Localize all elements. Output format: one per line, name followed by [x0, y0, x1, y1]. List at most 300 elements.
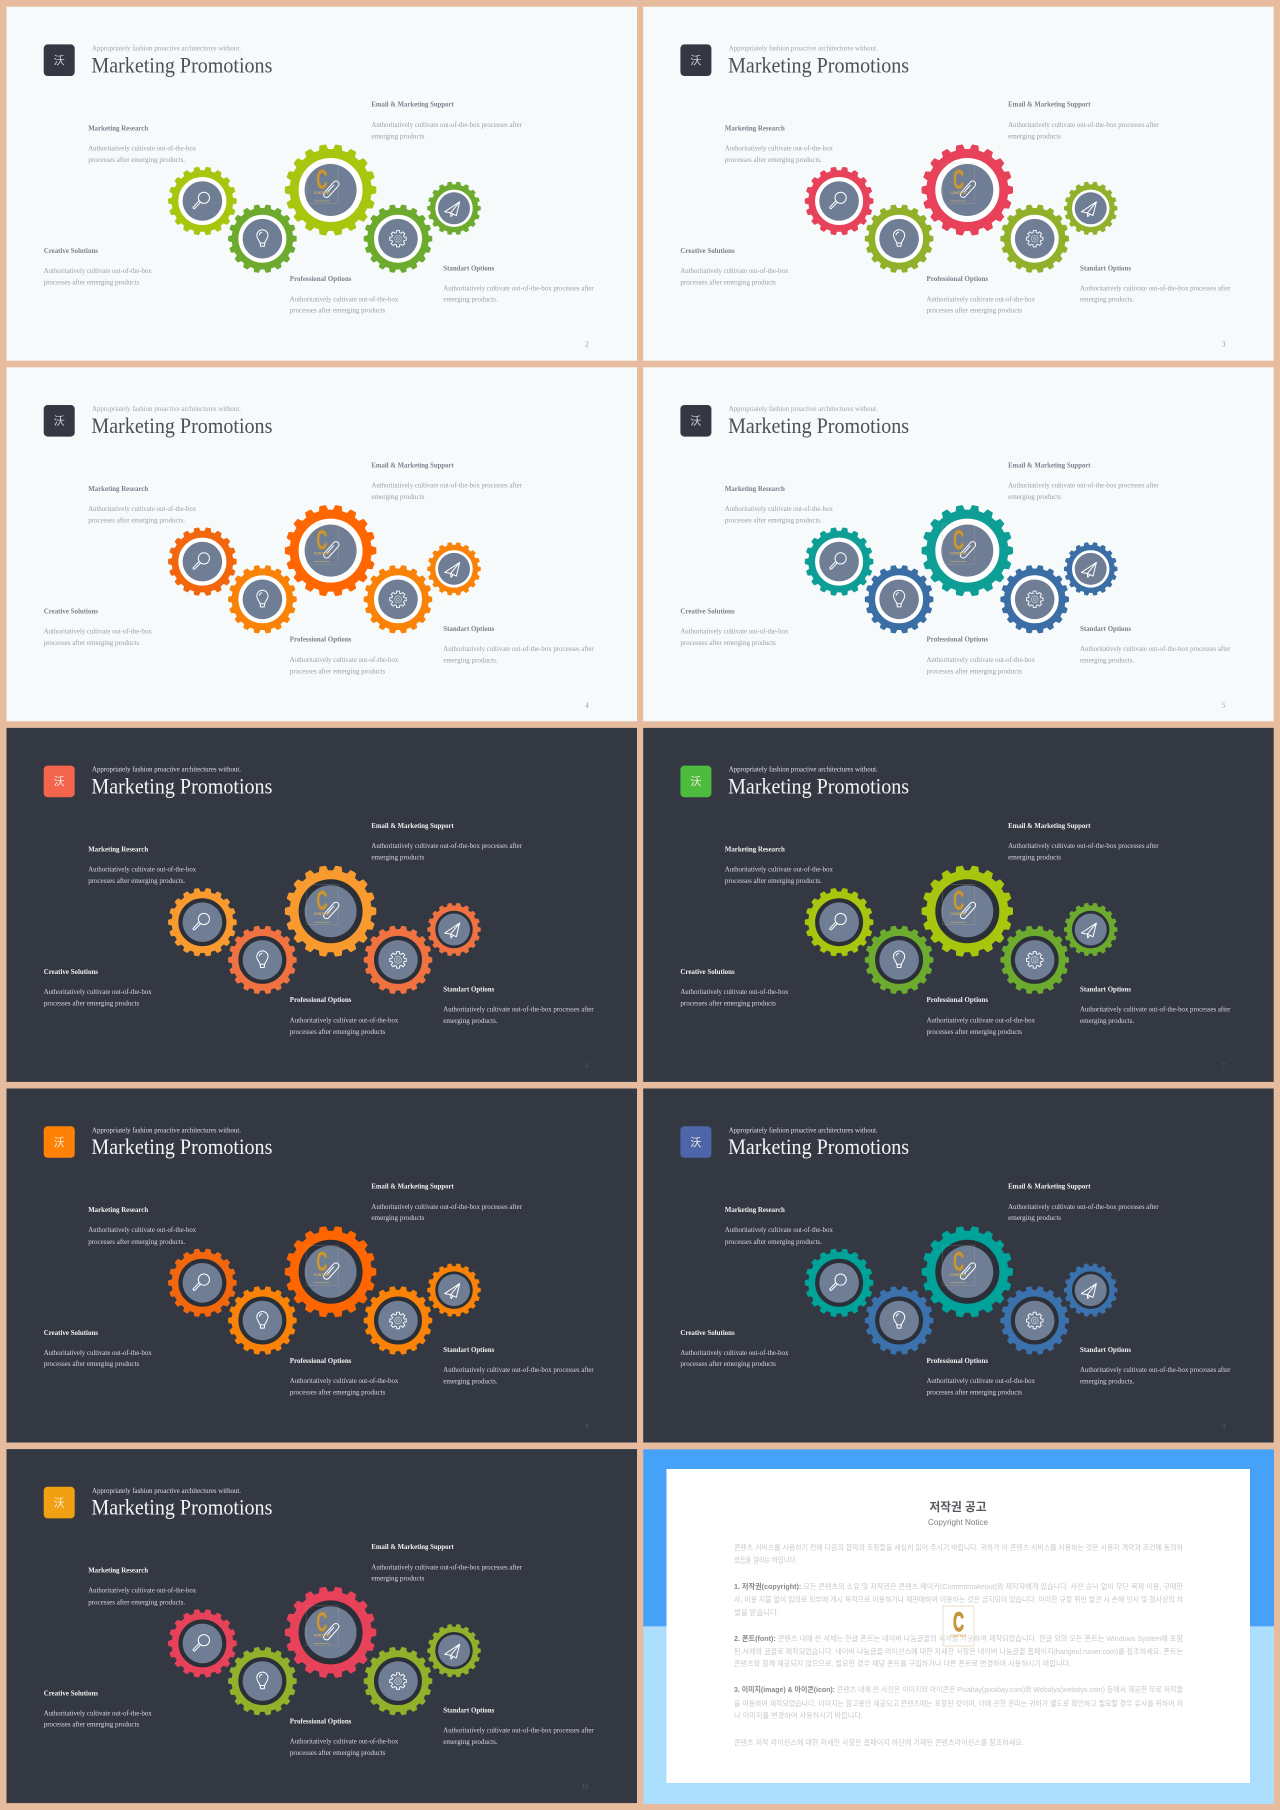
gear chain: [168, 144, 481, 273]
text: creative solutions: [44, 1328, 152, 1368]
text: professional options: [290, 1716, 399, 1757]
text: marketing research: Authoritatively cultivate out-of-the-box: [88, 1225, 196, 1234]
text: email and marketing support: Authoritatively cultivate out-of-the-box processes after: [371, 120, 522, 129]
icon badge: [44, 1126, 75, 1158]
gear: paper plane: [427, 1624, 481, 1678]
gear chain: [168, 1587, 481, 1715]
paragraph: image and icon: 나 이미지를 변경하여 사용하시기 바랍니다.: [734, 1710, 863, 1720]
text: standart options: Authoritatively cultivate out-of-the-box processes after: [443, 1726, 594, 1735]
text: email and marketing support: Authoritatively cultivate out-of-the-box processes after: [1008, 841, 1159, 850]
page number: 7: [1222, 1062, 1226, 1070]
text: email and marketing support: emerging products: [1008, 853, 1061, 862]
panel: slide 5 light teal: [643, 367, 1274, 721]
text: email and marketing support: emerging products: [1008, 492, 1061, 501]
paragraph: copyright: 1. 저작권(copyright): 모든 콘텐츠의 소유 및 저작권은 콘텐츠 메이커(Contentmakeout)와 제작자에게 있습니다. 사전 승낙 없이 무단 복제 이용, 구매한: [734, 1581, 1183, 1591]
text: standart options: Standart Options: [443, 263, 494, 272]
text: professional options: Authoritatively cultivate out-of-the-box: [926, 294, 1035, 303]
gear: pencil, large: [285, 144, 376, 236]
gear: paper plane: [1064, 181, 1117, 235]
text: standart options: emerging products.: [443, 295, 498, 304]
text: creative solutions: Authoritatively cultivate out-of-the-box: [44, 1348, 152, 1357]
title: Marketing Promotions: [91, 1134, 272, 1159]
text: creative solutions: Authoritatively cultivate out-of-the-box: [44, 987, 152, 996]
gear: pencil, large: [922, 865, 1013, 957]
text: email and marketing support: emerging products: [371, 492, 424, 501]
gear: cog: [364, 1286, 432, 1355]
paragraph: copyright: [734, 1581, 1183, 1617]
text: professional options: [290, 995, 399, 1036]
gear: cog: [364, 565, 432, 634]
text: creative solutions: Creative Solutions: [44, 1328, 98, 1337]
subtitle: Appropriately fashion proactive architectures without.: [729, 404, 878, 413]
text: email and marketing support: emerging products: [1008, 1213, 1061, 1222]
text: email and marketing support: Authoritatively cultivate out-of-the-box processes after: [371, 481, 522, 490]
text: email and marketing support: [371, 1182, 522, 1222]
text: email and marketing support: Email & Marketing Support: [371, 1182, 454, 1191]
text: marketing research: [88, 484, 196, 525]
text: professional options: [926, 274, 1035, 315]
text: professional options: [926, 635, 1035, 675]
text: email and marketing support: Email & Marketing Support: [371, 821, 454, 830]
text: professional options: Authoritatively cultivate out-of-the-box: [926, 1376, 1035, 1385]
gear: search: [168, 1609, 237, 1678]
gear: pencil, large: [922, 144, 1013, 236]
gear: cog: [364, 926, 432, 994]
gear: bulb: [865, 1286, 933, 1355]
paragraph: image and icon: 을 이용하여 제작되었습니다. 이미지는 참고용만 제공되고 콘텐츠에는 포함된 것이며, 이에 관한 권리는 귀하가 별도로 확인하고 필요할 경우 유사를 위하여 저: [734, 1698, 1183, 1708]
icon badge: 沃: [690, 415, 701, 428]
paragraph: font: 콘텐츠와 함께 제공되지 않으므로, 필요한 경우 해당 폰트를 구입하거나 다른 폰트로 변경하여 사용하시기 바랍니다.: [734, 1658, 1071, 1668]
panel: slide 2 light lime: [6, 7, 637, 361]
text: professional options: processes after emerging products: [290, 306, 385, 315]
gear: search: [168, 167, 237, 235]
text: professional options: Professional Options: [926, 274, 988, 283]
gear chain: [168, 1226, 481, 1355]
text: professional options: processes after emerging products: [926, 1388, 1022, 1397]
text: professional options: Authoritatively cultivate out-of-the-box: [926, 1016, 1035, 1024]
icon badge: 沃: [54, 1136, 65, 1149]
text: creative solutions: Creative Solutions: [44, 246, 98, 255]
text: professional options: [290, 635, 399, 675]
text: professional options: processes after emerging products: [926, 1027, 1022, 1036]
text: marketing research: Marketing Research: [88, 1205, 149, 1214]
text: email and marketing support: Email & Marketing Support: [1008, 100, 1091, 109]
copyright subtitle: Copyright Notice: [928, 1518, 988, 1527]
text: professional options: Professional Options: [290, 995, 351, 1004]
text: creative solutions: processes after emerging products: [44, 1359, 139, 1368]
text: marketing research: Marketing Research: [725, 484, 786, 493]
gear: bulb: [228, 926, 297, 994]
gear: cog: [1000, 565, 1069, 634]
text: creative solutions: processes after emerging products: [44, 998, 139, 1008]
text: marketing research: processes after emerging products.: [88, 1237, 185, 1246]
text: email and marketing support: Email & Marketing Support: [371, 100, 454, 109]
gear: paper plane: [427, 181, 481, 235]
closing note: 콘텐츠 저작 라이선스에 대한 자세한 사항은 홈페이지 하단에 기재된 콘텐츠라이선스를 참조하세요.: [734, 1737, 1024, 1747]
text: creative solutions: processes after emerging products: [680, 998, 776, 1008]
text: marketing research: Authoritatively cultivate out-of-the-box: [88, 143, 196, 152]
text: marketing research: processes after emerging products.: [725, 1237, 822, 1246]
text: standart options: Standart Options: [443, 1706, 494, 1715]
text: professional options: Authoritatively cultivate out-of-the-box: [290, 294, 399, 303]
text: creative solutions: Creative Solutions: [44, 607, 98, 616]
intro paragraph: 셨음을 알리는 바입니다.: [734, 1554, 797, 1564]
gear: bulb: [865, 565, 933, 634]
text: creative solutions: [680, 607, 789, 647]
text: creative solutions: Authoritatively cultivate out-of-the-box: [680, 266, 789, 275]
text: standart options: emerging products.: [443, 655, 498, 664]
text: email and marketing support: Email & Marketing Support: [1008, 1182, 1091, 1191]
text: marketing research: [725, 844, 833, 885]
text: email and marketing support: Authoritatively cultivate out-of-the-box processes after: [371, 841, 522, 850]
text: creative solutions: processes after emerging products: [44, 1720, 139, 1729]
panel: slide 3 light red: [643, 7, 1274, 361]
icon badge: 沃: [690, 775, 701, 788]
panel: slide 10 dark red: [6, 1449, 637, 1803]
gear: search: [168, 527, 237, 596]
text: creative solutions: processes after emerging products: [680, 638, 776, 647]
text: standart options: Standart Options: [1080, 624, 1131, 633]
text: marketing research: Marketing Research: [88, 845, 149, 854]
text: creative solutions: [44, 1688, 152, 1729]
text: marketing research: processes after emerging products.: [725, 876, 822, 885]
text: standart options: Authoritatively cultivate out-of-the-box processes after: [443, 1365, 594, 1374]
gear: paper plane: [1064, 542, 1117, 596]
text: standart options: Authoritatively cultivate out-of-the-box processes after: [1080, 644, 1231, 653]
gear: cog: [364, 1647, 432, 1715]
text: creative solutions: Authoritatively cultivate out-of-the-box: [44, 266, 152, 275]
gear: bulb: [865, 926, 933, 994]
gear: search: [805, 888, 873, 957]
gear: cog: [364, 204, 432, 273]
icon badge: [44, 766, 75, 797]
icon badge: 沃: [54, 1496, 65, 1509]
gear: pencil, large: [922, 505, 1013, 596]
text: email and marketing support: emerging products: [371, 1574, 424, 1583]
title: Marketing Promotions: [728, 413, 909, 438]
text: marketing research: Marketing Research: [88, 123, 149, 132]
text: email and marketing support: emerging products: [371, 853, 424, 862]
paragraph: font: [734, 1633, 1183, 1668]
gear chain: [805, 865, 1117, 994]
text: email and marketing support: Authoritatively cultivate out-of-the-box processes after: [371, 1202, 522, 1211]
text: email and marketing support: [371, 821, 522, 862]
text: professional options: processes after emerging products: [290, 666, 385, 675]
text: standart options: [443, 1706, 594, 1746]
panel: slide 6 dark amber: [6, 728, 637, 1082]
watermark logo: C: [953, 1607, 964, 1637]
text: marketing research: Marketing Research: [725, 123, 786, 132]
panel: copyright notice: [643, 1449, 1274, 1804]
text: standart options: Standart Options: [1080, 1345, 1131, 1354]
panel: slide 4 light orange: [6, 367, 637, 721]
text: standart options: Standart Options: [443, 624, 494, 633]
gear: search: [805, 167, 873, 235]
page number: 6: [585, 1062, 589, 1070]
text: email and marketing support: Email & Marketing Support: [1008, 460, 1091, 469]
gear: cog: [1000, 926, 1069, 994]
subtitle: Appropriately fashion proactive architectures without.: [729, 1125, 878, 1134]
text: email and marketing support: emerging products: [1008, 131, 1061, 140]
gear: pencil, large: [922, 1226, 1013, 1318]
page number: 2: [585, 341, 589, 349]
paragraph: font: 2. 폰트(font): 콘텐츠 내에 쓴 서체는 한글 폰트는 네이버 나눔글꼴의 서체를 사용하여 제작되었습니다. 한글 외의 모든 폰트는 Windows System에 포함: [734, 1633, 1183, 1643]
page number: 4: [585, 701, 589, 709]
watermark logo: [943, 1606, 974, 1646]
text: creative solutions: Authoritatively cultivate out-of-the-box: [44, 627, 152, 636]
gear chain: [805, 505, 1117, 634]
title: Marketing Promotions: [728, 774, 909, 799]
subtitle: Appropriately fashion proactive architectures without.: [92, 1486, 241, 1495]
text: standart options: Authoritatively cultivate out-of-the-box processes after: [443, 1004, 594, 1014]
text: creative solutions: [680, 1328, 789, 1368]
text: marketing research: processes after emerging products.: [725, 516, 822, 525]
text: standart options: Standart Options: [1080, 984, 1131, 994]
text: email and marketing support: [1008, 100, 1159, 140]
text: marketing research: [88, 1566, 196, 1606]
text: email and marketing support: [371, 460, 522, 501]
text: email and marketing support: Authoritatively cultivate out-of-the-box processes after: [1008, 120, 1159, 129]
icon badge: [44, 44, 75, 76]
icon badge: 沃: [54, 775, 65, 788]
text: standart options: emerging products.: [443, 1737, 498, 1746]
gear: pencil, large: [285, 1587, 376, 1678]
text: marketing research: processes after emerging products.: [88, 516, 185, 525]
panel: slide 7 dark lime: [643, 728, 1274, 1082]
icon badge: 沃: [690, 1136, 701, 1149]
text: creative solutions: processes after emerging products: [44, 277, 139, 286]
text: creative solutions: Authoritatively cultivate out-of-the-box: [680, 627, 789, 636]
text: professional options: processes after emerging products: [926, 306, 1022, 315]
text: creative solutions: [680, 967, 789, 1008]
page number: 10: [582, 1783, 589, 1791]
text: marketing research: Marketing Research: [88, 484, 149, 493]
gear chain: [168, 505, 481, 634]
gear: cog: [1000, 204, 1069, 273]
text: email and marketing support: emerging products: [371, 131, 424, 140]
text: standart options: Standart Options: [443, 1345, 494, 1354]
gear: paper plane: [427, 903, 481, 956]
text: marketing research: Marketing Research: [725, 845, 786, 854]
gear: pencil, large: [285, 505, 376, 596]
text: standart options: [443, 984, 594, 1025]
gear chain: [805, 144, 1117, 273]
intro paragraph: 콘텐츠 서비스를 사용하기 전에 다음의 협약과 조항들을 세심히 읽어 주시기 바랍니다. 귀하가 이 콘텐츠 서비스를 사용하는 것은 사용자 계약과 조건에 동의하: [734, 1542, 1183, 1552]
gear: paper plane: [427, 1263, 481, 1317]
gear: search: [805, 527, 873, 596]
text: standart options: emerging products.: [1080, 1377, 1134, 1386]
text: professional options: [290, 274, 399, 315]
text: professional options: [926, 1356, 1035, 1396]
icon badge: 沃: [690, 54, 701, 67]
intro paragraph: [734, 1542, 1183, 1564]
text: creative solutions: Creative Solutions: [680, 607, 735, 616]
text: marketing research: [88, 1205, 196, 1246]
title: Marketing Promotions: [91, 413, 272, 438]
title: Marketing Promotions: [728, 1134, 909, 1159]
text: marketing research: processes after emerging products.: [88, 155, 185, 164]
gear: paper plane: [1064, 1263, 1117, 1317]
gear chain: [805, 1226, 1117, 1355]
text: email and marketing support: Email & Marketing Support: [371, 1542, 454, 1551]
text: professional options: processes after emerging products: [290, 1748, 385, 1757]
text: professional options: [926, 995, 1035, 1036]
text: creative solutions: processes after emerging products: [680, 277, 776, 286]
text: creative solutions: Creative Solutions: [44, 1688, 98, 1697]
text: professional options: processes after emerging products: [926, 666, 1022, 675]
text: professional options: Professional Options: [290, 635, 351, 644]
text: marketing research: processes after emerging products.: [725, 155, 822, 164]
text: email and marketing support: [371, 1542, 522, 1583]
text: professional options: Authoritatively cultivate out-of-the-box: [926, 655, 1035, 664]
text: standart options: [443, 624, 594, 664]
watermark logo: CONTENT: [950, 1634, 968, 1638]
text: professional options: Professional Options: [290, 1716, 351, 1725]
text: standart options: [1080, 263, 1231, 304]
text: creative solutions: processes after emerging products: [680, 1359, 776, 1368]
text: creative solutions: Creative Solutions: [680, 246, 735, 255]
text: standart options: Standart Options: [443, 984, 494, 994]
text: creative solutions: [44, 607, 152, 647]
text: standart options: [1080, 1345, 1231, 1386]
gear: paper plane: [427, 542, 481, 596]
text: creative solutions: [680, 246, 789, 286]
page number: 5: [1222, 701, 1226, 709]
text: standart options: emerging products.: [1080, 295, 1134, 304]
text: marketing research: Authoritatively cultivate out-of-the-box: [88, 865, 196, 874]
text: marketing research: Authoritatively cultivate out-of-the-box: [725, 143, 833, 152]
icon badge: [680, 766, 711, 797]
text: creative solutions: Creative Solutions: [44, 967, 98, 976]
text: email and marketing support: Email & Marketing Support: [1008, 821, 1091, 830]
paragraph: font: 된 서체와 글꼴로 제작되었습니다. 네이버 나눔글꼴 라이선스에 대한 자세한 사항은 네이버 나눔글꼴 홈페이지(hangeul.naver.com)를 참조하세요. 폰트는: [734, 1646, 1183, 1656]
text: marketing research: [725, 1205, 833, 1246]
text: standart options: emerging products.: [443, 1377, 498, 1386]
text: standart options: emerging products.: [443, 1016, 498, 1025]
text: marketing research: Authoritatively cultivate out-of-the-box: [88, 504, 196, 513]
subtitle: Appropriately fashion proactive architectures without.: [729, 44, 878, 52]
text: email and marketing support: [1008, 1182, 1159, 1222]
text: creative solutions: [44, 967, 152, 1008]
paragraph: image and icon: 3. 이미지(image) & 아이콘(icon): 콘텐츠 내에 쓴 사진은 이미지와 아이콘은 Pixabay(pixabay.com)와 Webalys(webalys.com) 등에서 제공한 무료 저작물: [734, 1684, 1183, 1694]
text: marketing research: processes after emerging products.: [88, 876, 185, 885]
text: creative solutions: Authoritatively cultivate out-of-the-box: [44, 1708, 152, 1717]
subtitle: Appropriately fashion proactive architectures without.: [92, 44, 241, 52]
text: professional options: processes after emerging products: [290, 1027, 385, 1036]
icon badge: 沃: [54, 415, 65, 428]
panel: slide 8 dark orange: [6, 1088, 637, 1442]
text: email and marketing support: [1008, 821, 1159, 862]
text: standart options: [443, 263, 594, 304]
text: standart options: Authoritatively cultivate out-of-the-box processes after: [1080, 283, 1231, 292]
text: standart options: Authoritatively cultivate out-of-the-box processes after: [443, 283, 594, 292]
text: marketing research: [725, 123, 833, 164]
text: creative solutions: processes after emerging products: [44, 638, 139, 647]
icon badge: [680, 1126, 711, 1158]
gear: paper plane: [1064, 903, 1117, 956]
page number: 3: [1222, 341, 1226, 349]
text: standart options: emerging products.: [1080, 655, 1134, 664]
text: professional options: Authoritatively cultivate out-of-the-box: [290, 1016, 399, 1024]
gear: search: [168, 888, 237, 957]
text: professional options: Professional Options: [926, 635, 988, 644]
text: marketing research: Authoritatively cultivate out-of-the-box: [88, 1586, 196, 1595]
text: marketing research: Marketing Research: [88, 1566, 149, 1575]
text: standart options: [1080, 984, 1231, 1025]
page number: 9: [1222, 1423, 1226, 1431]
text: standart options: Authoritatively cultivate out-of-the-box processes after: [1080, 1365, 1231, 1374]
title: Marketing Promotions: [91, 1495, 272, 1520]
gear: bulb: [228, 565, 297, 634]
text: marketing research: [725, 484, 833, 525]
icon badge: [44, 405, 75, 437]
gear: search: [805, 1248, 873, 1317]
text: email and marketing support: [1008, 460, 1159, 501]
text: email and marketing support: [371, 100, 522, 140]
gear: bulb: [228, 1286, 297, 1355]
text: standart options: Authoritatively cultivate out-of-the-box processes after: [1080, 1004, 1231, 1014]
text: standart options: Standart Options: [1080, 263, 1131, 272]
paragraph: copyright: 벌을 받습니다.: [734, 1607, 779, 1617]
title: Marketing Promotions: [728, 52, 909, 77]
icon badge: [44, 1487, 75, 1518]
text: email and marketing support: Authoritatively cultivate out-of-the-box processes after: [371, 1562, 522, 1571]
text: standart options: [443, 1345, 594, 1386]
title: Marketing Promotions: [91, 774, 272, 799]
icon badge: [680, 44, 711, 76]
text: email and marketing support: Authoritatively cultivate out-of-the-box processes after: [1008, 481, 1159, 490]
text: professional options: Professional Options: [926, 1356, 988, 1365]
text: marketing research: Authoritatively cultivate out-of-the-box: [725, 504, 833, 513]
text: marketing research: Marketing Research: [725, 1205, 786, 1214]
text: email and marketing support: Email & Marketing Support: [371, 460, 454, 469]
text: professional options: Authoritatively cultivate out-of-the-box: [290, 1737, 399, 1746]
text: marketing research: processes after emerging products.: [88, 1597, 185, 1606]
text: professional options: Authoritatively cultivate out-of-the-box: [290, 1376, 399, 1385]
gear: pencil, large: [285, 1226, 376, 1318]
text: standart options: [1080, 624, 1231, 664]
text: email and marketing support: Authoritatively cultivate out-of-the-box processes after: [1008, 1202, 1159, 1211]
text: creative solutions: [44, 246, 152, 286]
gear: cog: [1000, 1286, 1069, 1355]
gear: pencil, large: [285, 865, 376, 957]
text: marketing research: Authoritatively cultivate out-of-the-box: [725, 1225, 833, 1234]
panel: slide 9 dark teal: [643, 1088, 1274, 1442]
gear: bulb: [228, 1647, 297, 1715]
paragraph: image and icon: [734, 1684, 1183, 1720]
page number: 8: [585, 1423, 589, 1431]
subtitle: Appropriately fashion proactive architectures without.: [92, 404, 241, 413]
gear: search: [168, 1248, 237, 1317]
text: professional options: Professional Options: [926, 995, 988, 1004]
copyright title: 저작권 공고: [930, 1499, 986, 1514]
text: marketing research: Authoritatively cultivate out-of-the-box: [725, 865, 833, 874]
gear: bulb: [228, 204, 297, 273]
text: professional options: Professional Options: [290, 1356, 351, 1365]
text: professional options: [290, 1356, 399, 1396]
icon badge: [680, 405, 711, 437]
text: creative solutions: Authoritatively cultivate out-of-the-box: [680, 987, 789, 996]
text: standart options: emerging products.: [1080, 1016, 1134, 1025]
subtitle: Appropriately fashion proactive architectures without.: [92, 1125, 241, 1134]
text: creative solutions: Authoritatively cultivate out-of-the-box: [680, 1348, 789, 1357]
gear chain: [168, 865, 481, 994]
text: professional options: Authoritatively cultivate out-of-the-box: [290, 655, 399, 664]
subtitle: Appropriately fashion proactive architectures without.: [729, 765, 878, 774]
text: marketing research: [88, 123, 196, 164]
text: professional options: Professional Options: [290, 274, 351, 283]
title: Marketing Promotions: [91, 52, 272, 77]
